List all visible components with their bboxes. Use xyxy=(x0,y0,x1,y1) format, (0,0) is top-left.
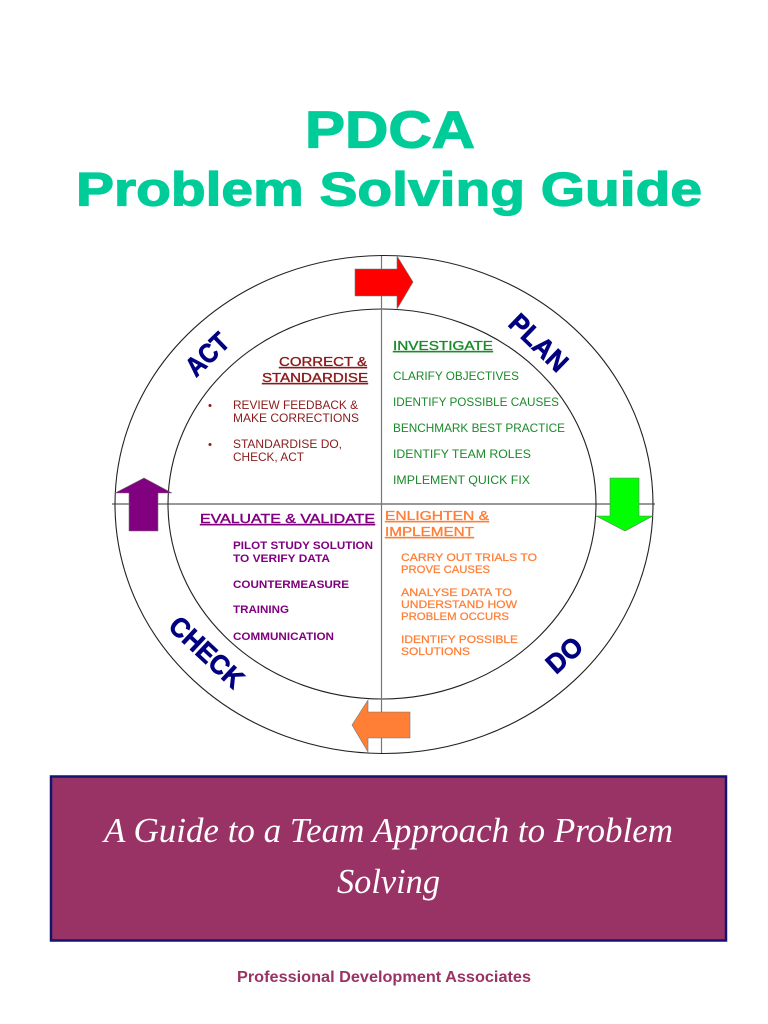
plan items: IDENTIFY POSSIBLE CAUSES xyxy=(393,395,559,409)
heading: enlighten and implement: IMPLEMENT xyxy=(385,524,474,539)
banner text xyxy=(102,811,673,901)
PDCA cycle diagram xyxy=(112,256,655,754)
do items: UNDERSTAND HOW xyxy=(401,599,518,611)
do items: PROVE CAUSES xyxy=(401,564,490,576)
do items: PROBLEM OCCURS xyxy=(401,611,509,623)
panel: check xyxy=(200,511,375,643)
heading: correct and standardise xyxy=(262,354,368,385)
act items: MAKE CORRECTIONS xyxy=(233,411,359,425)
heading: evaluate and validate: EVALUATE & VALIDATE xyxy=(200,511,375,526)
act items: STANDARDISE DO, xyxy=(233,437,342,451)
act items: CHECK, ACT xyxy=(233,450,305,464)
panel: plan xyxy=(393,338,565,487)
do items xyxy=(401,552,537,658)
heading: correct and standardise: CORRECT & xyxy=(279,354,367,369)
act items: REVIEW FEEDBACK & xyxy=(233,398,358,412)
do items: IDENTIFY POSSIBLE xyxy=(401,634,518,646)
ring label: PLAN: PLAN xyxy=(503,308,574,378)
plan items xyxy=(393,369,565,487)
check items: COMMUNICATION xyxy=(233,631,334,643)
heading: investigate: INVESTIGATE xyxy=(393,338,493,353)
do items: ANALYSE DATA TO xyxy=(401,587,512,599)
heading: enlighten and implement: ENLIGHTEN & xyxy=(385,508,489,523)
ring label: CHECK: CHECK xyxy=(163,610,250,695)
check items xyxy=(233,540,373,643)
panel: do xyxy=(385,508,537,658)
check items: TRAINING xyxy=(233,604,289,616)
banner text: A Guide to a Team Approach to Problem xyxy=(102,811,673,850)
arrow: check (orange, left) xyxy=(352,700,410,752)
plan items: CLARIFY OBJECTIVES xyxy=(393,369,519,383)
banner xyxy=(51,776,726,940)
arrow: act (purple, up) xyxy=(115,478,172,531)
arrow: plan (red, right) xyxy=(355,256,413,309)
check items: PILOT STUDY SOLUTION xyxy=(233,540,373,552)
plan items: IDENTIFY TEAM ROLES xyxy=(393,447,531,461)
check items: COUNTERMEASURE xyxy=(233,579,349,591)
do items: CARRY OUT TRIALS TO xyxy=(401,552,537,564)
do items: SOLUTIONS xyxy=(401,646,470,658)
check items: TO VERIFY DATA xyxy=(233,553,330,565)
title: PDCA xyxy=(305,102,475,160)
plan items: BENCHMARK BEST PRACTICE xyxy=(393,421,565,435)
heading: correct and standardise: STANDARDISE xyxy=(262,370,368,385)
arrow: do (green, down) xyxy=(596,478,653,531)
banner text: Solving xyxy=(337,862,440,901)
heading: enlighten and implement xyxy=(385,508,489,539)
act items xyxy=(208,398,359,464)
ring label: ACT: ACT xyxy=(179,326,236,382)
footer: organisation name: Professional Development Associates xyxy=(237,969,531,986)
plan items: IMPLEMENT QUICK FIX xyxy=(393,473,530,487)
title xyxy=(76,102,702,216)
ring label: DO: DO xyxy=(540,631,589,679)
title: Problem Solving Guide xyxy=(76,162,702,216)
panel: act xyxy=(208,354,368,464)
